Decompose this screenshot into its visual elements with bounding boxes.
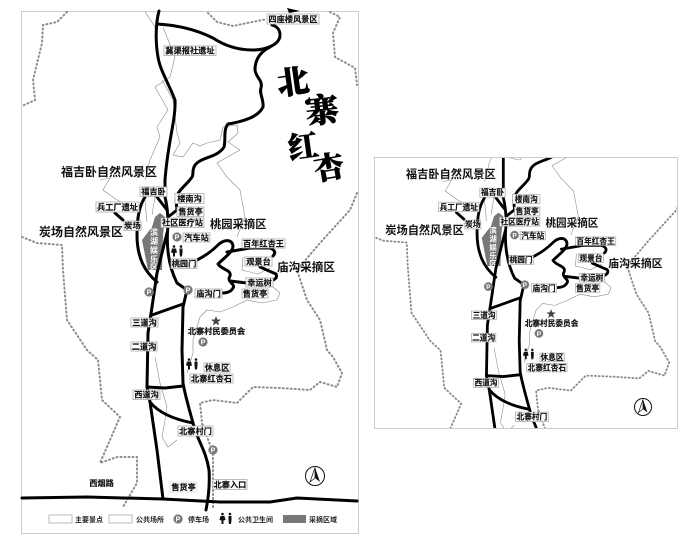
- label: 北寨村民委员会: 北寨村民委员会: [188, 326, 245, 336]
- label: 汽车站: 汽车站: [521, 230, 545, 240]
- legend: 公共场所: [136, 515, 164, 524]
- label: 幸运树: 幸运树: [247, 278, 272, 288]
- picking area: lakeside recreation zone: [482, 213, 503, 268]
- label: 兵工厂遗址: 兵工厂遗址: [440, 202, 478, 212]
- icon: parking: P: [512, 232, 517, 239]
- label: 社区医疗站: 社区医疗站: [501, 216, 539, 226]
- icon: parking: [521, 281, 529, 289]
- label: 北寨入口: 北寨入口: [214, 480, 246, 490]
- label: 庙沟门: 庙沟门: [533, 283, 556, 293]
- picking area: lakeside recreation zone: 区: [489, 259, 497, 268]
- region: 庙沟采摘区: 庙沟采摘区: [277, 260, 335, 274]
- icon: parking: P: [186, 288, 191, 294]
- panel: large map: [22, 8, 358, 534]
- icon: parking: [172, 232, 182, 242]
- road network: [22, 8, 357, 510]
- label: 北寨村门: 北寨村门: [179, 426, 212, 436]
- legend: 停车场: [188, 515, 209, 524]
- picking area: lakeside recreation zone: 娱: [150, 245, 158, 255]
- label: 百年红杏王: 百年红杏王: [243, 238, 284, 248]
- streams: [442, 158, 612, 428]
- icon: parking: P: [523, 282, 528, 289]
- label: 北寨红杏石: 北寨红杏石: [528, 362, 566, 372]
- region: 炭场自然风景区: 炭场自然风景区: [385, 223, 464, 237]
- label: 休息区: 休息区: [205, 362, 229, 372]
- icon: north compass: [634, 398, 652, 416]
- road network: [456, 151, 608, 453]
- legend: 主要景点: [75, 515, 103, 524]
- icon: parking: P: [147, 290, 152, 296]
- icon: star: [211, 316, 221, 326]
- icon: restroom: [171, 245, 182, 256]
- title calligraphy: 寨: [303, 83, 341, 134]
- region: 庙沟采摘区: 庙沟采摘区: [608, 256, 663, 270]
- icon: parking: P: [201, 340, 206, 346]
- legend: P: [176, 516, 181, 524]
- label: 百年红杏王: 百年红杏王: [576, 236, 615, 246]
- title calligraphy: 杏: [310, 141, 347, 189]
- legend: 公共卫生间: [238, 515, 273, 524]
- label: 桃园门: 桃园门: [172, 258, 196, 268]
- label: 三道沟: 三道沟: [132, 318, 157, 328]
- icon: parking: [484, 282, 493, 291]
- title calligraphy: 红: [285, 120, 321, 168]
- icon: parking: [184, 286, 192, 294]
- label: 西烟路: 西烟路: [89, 478, 115, 488]
- label: 售货亭: 售货亭: [576, 283, 599, 293]
- icon: parking: [510, 231, 519, 239]
- streams: [100, 12, 280, 447]
- label: 北寨村门: 北寨村门: [517, 412, 548, 422]
- label: 售货亭: 售货亭: [516, 206, 539, 216]
- region: 福吉卧自然风景区: 福吉卧自然风景区: [406, 167, 496, 181]
- legend: [49, 513, 337, 524]
- region: 福吉卧自然风景区: 福吉卧自然风景区: [61, 164, 157, 179]
- icon: restroom: [523, 349, 534, 359]
- label: 售货亭: 售货亭: [171, 482, 196, 492]
- icon: parking: P: [211, 448, 216, 454]
- label: 休息区: 休息区: [541, 352, 564, 362]
- picking area: lakeside recreation zone: 湖: [150, 236, 158, 246]
- legend: 采摘区域: [309, 515, 337, 524]
- label: 炭场: 炭场: [465, 219, 481, 229]
- label: 炭场: 炭场: [124, 220, 141, 230]
- label: 售货亭: 售货亭: [243, 288, 267, 298]
- label: 二道沟: 二道沟: [132, 342, 156, 352]
- icon: parking: [198, 338, 208, 346]
- label: 冀渠报社遗址: 冀渠报社遗址: [165, 46, 215, 56]
- title calligraphy: [274, 55, 347, 189]
- icon: parking: P: [537, 331, 542, 338]
- label: 兵工厂遗址: 兵工厂遗址: [97, 202, 138, 212]
- region: 炭场自然风景区: 炭场自然风景区: [39, 224, 123, 239]
- label: 北寨红杏石: 北寨红杏石: [191, 374, 232, 384]
- label: 楼南沟: 楼南沟: [177, 194, 202, 204]
- label: 观景台: 观景台: [246, 256, 271, 266]
- scenic area boundaries: [375, 207, 677, 428]
- icon: parking: P: [486, 284, 491, 291]
- region: 桃园采摘区: 桃园采摘区: [545, 217, 599, 230]
- label: 售货亭: 售货亭: [178, 206, 203, 216]
- icon: parking: P: [175, 234, 180, 242]
- picking area: lakeside recreation zone: 乐: [150, 254, 158, 264]
- icon: star: [546, 309, 556, 318]
- picking area: lakeside recreation zone: 乐: [489, 250, 497, 260]
- label: 幸运树: 幸运树: [580, 273, 604, 283]
- label: 西道沟: 西道沟: [474, 377, 498, 387]
- title calligraphy: 北: [274, 55, 312, 105]
- scenic area boundaries: [22, 12, 357, 507]
- panel: small map: [374, 157, 678, 429]
- label: 桃园门: 桃园门: [510, 255, 533, 265]
- label: 三道沟: 三道沟: [473, 310, 496, 320]
- label: 北寨村民委员会: 北寨村民委员会: [525, 318, 579, 328]
- picking area: lakeside recreation zone: 滨: [150, 227, 158, 237]
- label: 社区医疗站: 社区医疗站: [162, 218, 203, 228]
- icon: parking: [535, 329, 543, 338]
- picking area: lakeside recreation zone: 湖: [489, 234, 497, 244]
- label: 二道沟: 二道沟: [472, 332, 495, 342]
- label: 楼南沟: 楼南沟: [515, 194, 538, 204]
- label: 四座楼风景区: 四座楼风景区: [268, 14, 318, 24]
- picking area: lakeside recreation zone: [142, 213, 165, 272]
- label: 福吉卧: 福吉卧: [141, 186, 166, 196]
- picking area: lakeside recreation zone: 娱: [489, 242, 497, 252]
- picking area: lakeside recreation zone: 滨: [489, 225, 497, 235]
- label: 福吉卧: 福吉卧: [481, 187, 504, 197]
- icon: restroom: [186, 358, 198, 370]
- picking area: lakeside recreation zone: 区: [150, 263, 158, 272]
- icon: north compass: [306, 466, 324, 486]
- label: 观景台: 观景台: [579, 253, 603, 263]
- label: 庙沟门: 庙沟门: [196, 288, 221, 298]
- region: 桃园采摘区: 桃园采摘区: [210, 217, 266, 231]
- label: 汽车站: 汽车站: [184, 232, 209, 242]
- label: 西道沟: 西道沟: [134, 390, 159, 400]
- icon: parking: [144, 288, 154, 296]
- icon: parking: [208, 446, 218, 454]
